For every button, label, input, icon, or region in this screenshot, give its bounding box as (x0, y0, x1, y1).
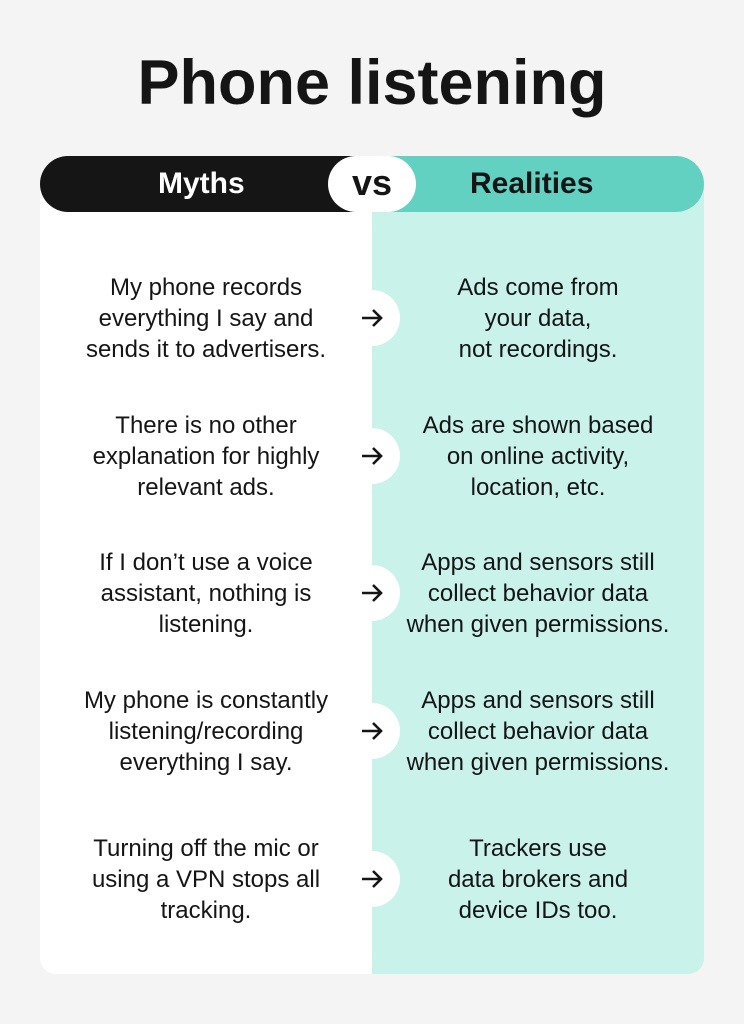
row 2 reality (422, 412, 653, 501)
row 3 myth: listening. (159, 611, 253, 638)
row 3 myth: If I don’t use a voice (99, 549, 313, 576)
row 4 reality: when given permissions. (407, 749, 669, 776)
row 5 myth (92, 835, 320, 924)
row 1 myth: everything I say and (99, 305, 313, 332)
row 1 reality (457, 274, 619, 363)
row 2 myth: relevant ads. (137, 474, 275, 501)
row 3 reality: Apps and sensors still (421, 549, 655, 576)
row 5 reality: Trackers use (469, 835, 607, 862)
row 4 myth: My phone is constantly (84, 687, 328, 714)
row 2 myth (93, 412, 320, 501)
header: myths: Myths (158, 167, 245, 200)
row 1 myth: My phone records (110, 274, 302, 301)
row 3 reality: when given permissions. (407, 611, 669, 638)
row 5 myth: using a VPN stops all (92, 866, 320, 893)
row 2 reality: location, etc. (471, 474, 605, 501)
vs badge (328, 156, 416, 212)
row 3 reality (406, 549, 669, 638)
row 4 arrow (344, 703, 400, 759)
row 1 reality: not recordings. (459, 336, 617, 363)
row 3 myth: assistant, nothing is (101, 580, 311, 607)
header: realities: Realities (470, 167, 593, 200)
row 4 myth (84, 687, 328, 776)
row 2 arrow (344, 428, 400, 484)
row 2 myth: There is no other (115, 412, 297, 439)
row 3 reality: collect behavior data (428, 580, 648, 607)
panel: body (40, 186, 704, 974)
row 5 reality: device IDs too. (459, 897, 617, 924)
row 4 myth: everything I say. (120, 749, 292, 776)
row 1 myth (86, 274, 326, 363)
row 5 arrow (344, 851, 400, 907)
row 2 reality: on online activity, (447, 443, 629, 470)
row 1 arrow (344, 290, 400, 346)
panel: myths column (40, 184, 372, 974)
header: myths (40, 156, 380, 212)
row 3 arrow (344, 565, 400, 621)
panel: realities column (372, 184, 704, 974)
row 4 reality (406, 687, 669, 776)
row 2 reality: Ads are shown based (423, 412, 653, 439)
row 5 myth: Turning off the mic or (93, 835, 319, 862)
header: realities (372, 156, 704, 212)
row 2 myth: explanation for highly (93, 443, 319, 470)
row 5 myth: tracking. (161, 897, 251, 924)
vs badge: vs (352, 162, 392, 203)
row 4 myth: listening/recording (109, 718, 303, 745)
row 5 reality (448, 835, 628, 924)
row 4 reality: Apps and sensors still (421, 687, 655, 714)
row 1 myth: sends it to advertisers. (86, 336, 326, 363)
row 1 reality: Ads come from (457, 274, 619, 301)
row 3 myth (99, 549, 313, 638)
row 5 reality: data brokers and (448, 866, 628, 893)
row 1 reality: your data, (485, 305, 591, 332)
title: Phone listening (137, 48, 607, 118)
row 4 reality: collect behavior data (428, 718, 648, 745)
